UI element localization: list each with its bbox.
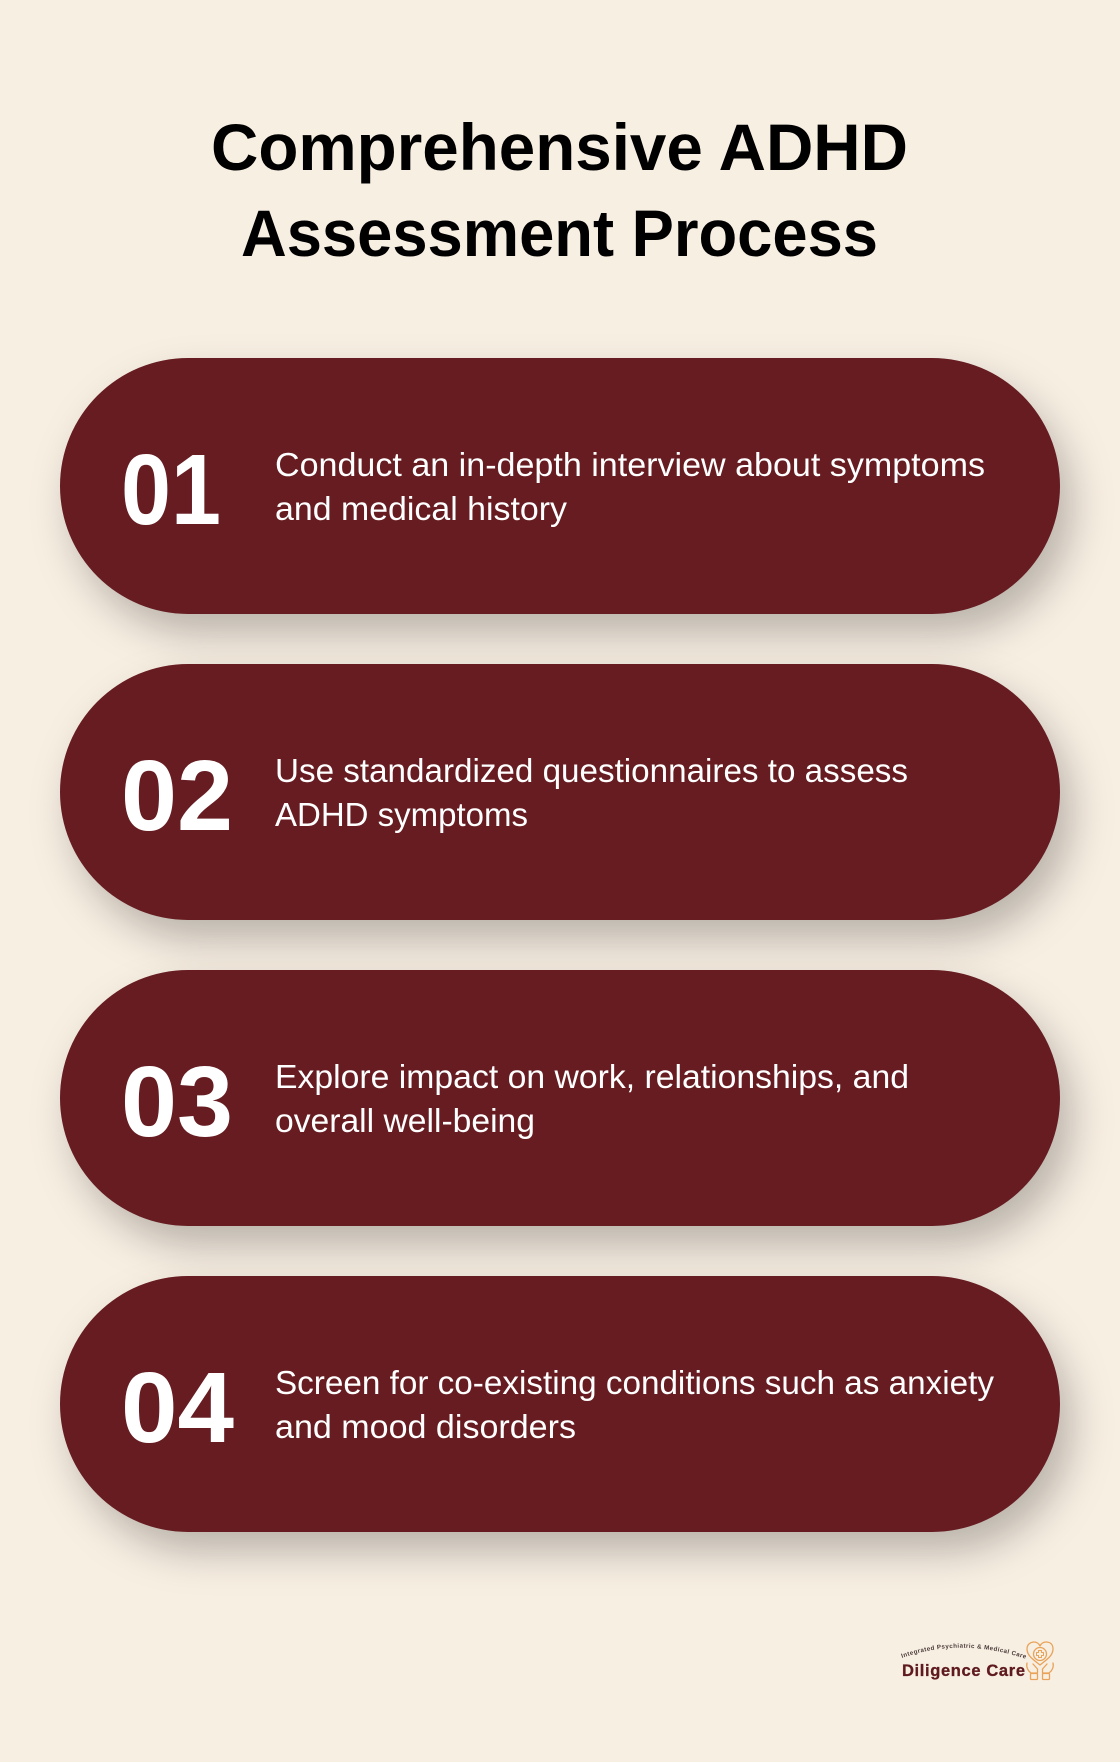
description 01: Conduct an in-depth interview about symptoms bbox=[275, 446, 985, 483]
step number 01: 01 bbox=[121, 434, 221, 546]
title: Assessment Process bbox=[241, 196, 878, 270]
panel: step 04 bbox=[60, 1276, 1060, 1532]
panel: step 02 bbox=[60, 664, 1060, 920]
description 02: ADHD symptoms bbox=[275, 796, 528, 833]
description 01 bbox=[275, 446, 985, 527]
description 04: and mood disorders bbox=[275, 1408, 576, 1445]
description 04: Screen for co-existing conditions such as anxiety bbox=[275, 1364, 995, 1401]
title: Comprehensive ADHD bbox=[211, 110, 908, 184]
step number 04: 04 bbox=[121, 1352, 234, 1464]
logo wordmark: Diligence Care bbox=[902, 1662, 1025, 1680]
step number 02: 02 bbox=[121, 740, 233, 852]
description 02: Use standardized questionnaires to assess bbox=[275, 752, 908, 789]
pill background 04 bbox=[60, 1276, 1060, 1532]
title bbox=[211, 110, 908, 270]
description 03 bbox=[275, 1058, 909, 1139]
description 04 bbox=[275, 1364, 995, 1445]
logo: Diligence Care bbox=[901, 1641, 1054, 1680]
logo tagline: Integrated Psychiatric & Medical Care bbox=[901, 1643, 1026, 1658]
step number 03: 03 bbox=[121, 1046, 233, 1158]
pill background 01 bbox=[60, 358, 1060, 614]
icon: heart in caring hands bbox=[1027, 1642, 1053, 1680]
description 01: and medical history bbox=[275, 490, 568, 527]
description 03: overall well-being bbox=[275, 1102, 535, 1139]
pill background 02 bbox=[60, 664, 1060, 920]
panel: step 03 bbox=[60, 970, 1060, 1226]
description 03: Explore impact on work, relationships, and bbox=[275, 1058, 909, 1095]
panel: step 01 bbox=[60, 358, 1060, 614]
pill background 03 bbox=[60, 970, 1060, 1226]
description 02 bbox=[275, 752, 908, 833]
